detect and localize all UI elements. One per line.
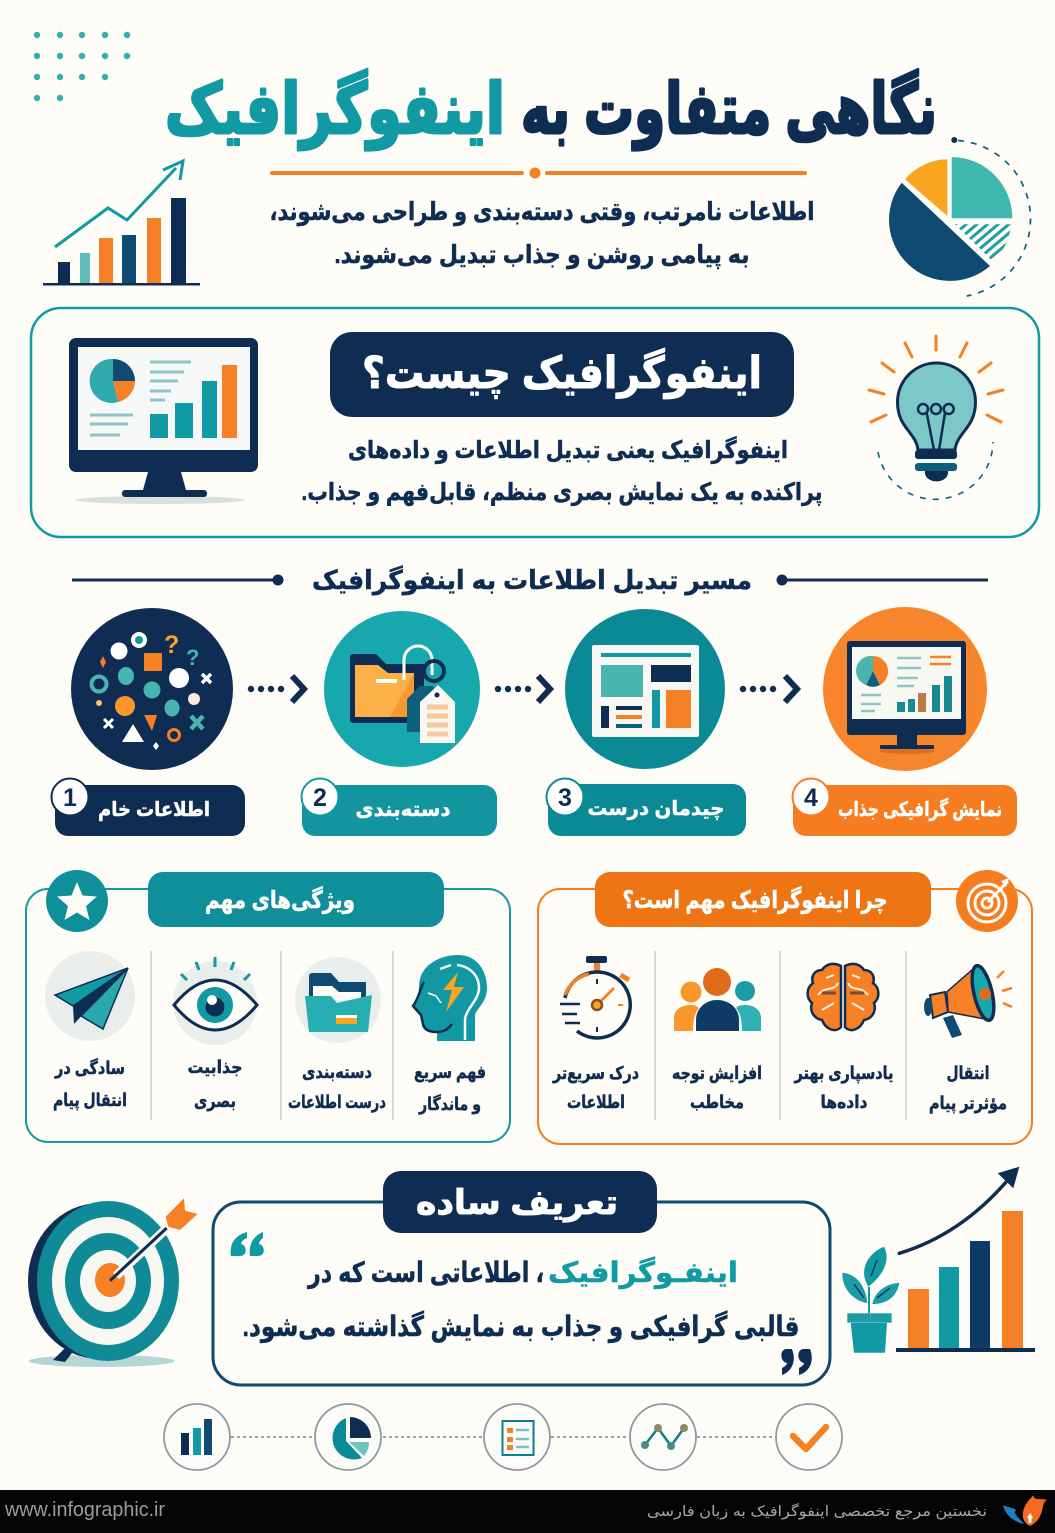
benefit: effective message bbox=[924, 964, 1012, 1114]
icon: pie chart bbox=[889, 137, 1031, 310]
quote text: قالبی گرافیکی و جذاب به نمایش گذاشته می‌شود. bbox=[242, 1310, 800, 1343]
definition text bbox=[302, 436, 822, 506]
icon: growth chart with plant bbox=[842, 1167, 1035, 1353]
panel: why infographics matter bbox=[538, 870, 1032, 1144]
feature: visual appeal: بصری bbox=[194, 1091, 236, 1112]
panel: what is infographic bbox=[31, 308, 1039, 537]
section heading: process: مسیر تبدیل اطلاعات به اینفوگرافیک bbox=[312, 565, 752, 596]
benefit: better recall bbox=[794, 964, 894, 1112]
step 4 label: 4 bbox=[804, 784, 818, 812]
subtitle bbox=[270, 198, 814, 270]
arrow 1 bbox=[248, 676, 304, 702]
icon: pie bbox=[315, 1404, 381, 1470]
step 3 label bbox=[546, 778, 746, 836]
benefit: audience attention: افزایش توجه bbox=[672, 1063, 762, 1084]
footer url: www.infographic.ir bbox=[4, 1499, 165, 1521]
title divider bbox=[270, 168, 807, 178]
heading: key features: ویژگی‌های مهم bbox=[205, 886, 355, 914]
feature: simplicity bbox=[45, 951, 135, 1111]
feature: simplicity: سادگی در bbox=[54, 1058, 125, 1078]
quote mark: closing bbox=[781, 1349, 812, 1375]
step 1 label bbox=[52, 778, 245, 836]
feature: organising bbox=[288, 957, 386, 1112]
heading: why it matters bbox=[595, 872, 931, 927]
feature: quick understanding: فهم سریع bbox=[414, 1062, 486, 1083]
subtitle: به پیامی روشن و جذاب تبدیل می‌شوند. bbox=[334, 241, 750, 270]
footer logo bbox=[1003, 1495, 1047, 1526]
step 2 label: 2 bbox=[313, 784, 327, 812]
icon: list bbox=[484, 1404, 550, 1470]
benefit: effective message: انتقال bbox=[946, 1063, 990, 1083]
benefit: better recall: یادسپاری بهتر bbox=[794, 1063, 894, 1084]
feature: organising: دسته‌بندی bbox=[302, 1062, 372, 1082]
benefit: faster understanding bbox=[552, 956, 639, 1112]
arrow 2 bbox=[495, 676, 550, 702]
heading: simple definition: تعریف ساده bbox=[416, 1184, 618, 1223]
heading: key features bbox=[148, 872, 444, 927]
step 4 label bbox=[792, 778, 1017, 836]
step 1 icon: raw information: ? bbox=[164, 631, 179, 659]
icon: target with arrow bbox=[28, 1198, 198, 1367]
step 1 label: اطلاعات خام bbox=[98, 799, 210, 821]
section heading: process bbox=[72, 565, 988, 596]
quote mark: opening bbox=[231, 1232, 264, 1256]
step 2 label bbox=[302, 778, 497, 836]
icon: line graph bbox=[630, 1404, 696, 1470]
icon: light bulb bbox=[869, 336, 1003, 499]
step 1 icon: raw information bbox=[71, 608, 233, 770]
definition text: اینفوگرافیک یعنی تبدیل اطلاعات و داده‌های bbox=[348, 436, 788, 464]
step 1 icon: raw information: ? bbox=[186, 645, 199, 670]
footer tagline: نخستین مرجع تخصصی اینفوگرافیک به زبان فارسی bbox=[647, 1503, 987, 1520]
heading: why it matters: چرا اینفوگرافیک مهم است؟ bbox=[622, 886, 888, 914]
step 4 icon: graphic display bbox=[823, 607, 987, 771]
feature: visual appeal: جذابیت bbox=[188, 1057, 242, 1077]
feature: visual appeal bbox=[173, 957, 257, 1112]
feature: quick understanding bbox=[413, 955, 487, 1115]
icon: target badge bbox=[956, 870, 1018, 932]
feature: organising: درست اطلاعات bbox=[288, 1092, 386, 1112]
panel: key features bbox=[26, 870, 510, 1142]
subtitle: اطلاعات نامرتب، وقتی دسته‌بندی و طراحی می‌شوند، bbox=[270, 198, 814, 227]
benefit: effective message: مؤثرتر پیام bbox=[929, 1093, 1007, 1114]
footer bar bbox=[0, 1490, 1055, 1533]
step 4 label: نمایش گرافیکی جذاب bbox=[838, 797, 1002, 821]
icon: rising bar chart bbox=[43, 161, 200, 286]
decorative dot grid bbox=[34, 32, 130, 101]
step 3 label: چیدمان درست bbox=[588, 798, 724, 821]
step 3 icon: layout bbox=[565, 609, 725, 769]
step 1 label: 1 bbox=[63, 784, 77, 812]
quote text: ، اطلاعاتی است که در bbox=[306, 1257, 544, 1289]
title bbox=[165, 69, 937, 150]
feature: quick understanding: و ماندگار bbox=[418, 1094, 481, 1115]
step 3 label: 3 bbox=[558, 784, 572, 812]
icon: check mark bbox=[776, 1404, 842, 1470]
benefit: faster understanding: درک سریع‌تر bbox=[552, 1063, 639, 1084]
benefit: audience attention: مخاطب bbox=[690, 1092, 744, 1112]
quote text: اینفـوگرافیک bbox=[548, 1256, 738, 1289]
icon: star badge bbox=[46, 870, 108, 932]
feature: simplicity: انتقال پیام bbox=[53, 1090, 127, 1111]
icon: monitor bbox=[69, 338, 258, 504]
icon row bbox=[164, 1404, 842, 1470]
icon: bars bbox=[164, 1404, 230, 1470]
title: اینفوگرافیک bbox=[165, 69, 505, 150]
benefit: audience attention bbox=[672, 968, 762, 1112]
arrow 3 bbox=[740, 676, 797, 702]
benefit: faster understanding: اطلاعات bbox=[567, 1092, 625, 1112]
definition text: پراکنده به یک نمایش بصری منظم، قابل‌فهم و جذاب. bbox=[302, 479, 822, 506]
benefit: better recall: داده‌ها bbox=[820, 1092, 868, 1112]
panel: simple definition bbox=[213, 1171, 830, 1385]
heading: what is infographic bbox=[330, 332, 794, 417]
heading: simple definition bbox=[383, 1171, 657, 1233]
step 2 label: دسته‌بندی bbox=[356, 799, 450, 821]
quote text bbox=[242, 1256, 800, 1343]
step 2 icon: categorisation bbox=[324, 611, 480, 767]
heading: what is infographic: اینفوگرافیک چیست؟ bbox=[362, 347, 762, 399]
